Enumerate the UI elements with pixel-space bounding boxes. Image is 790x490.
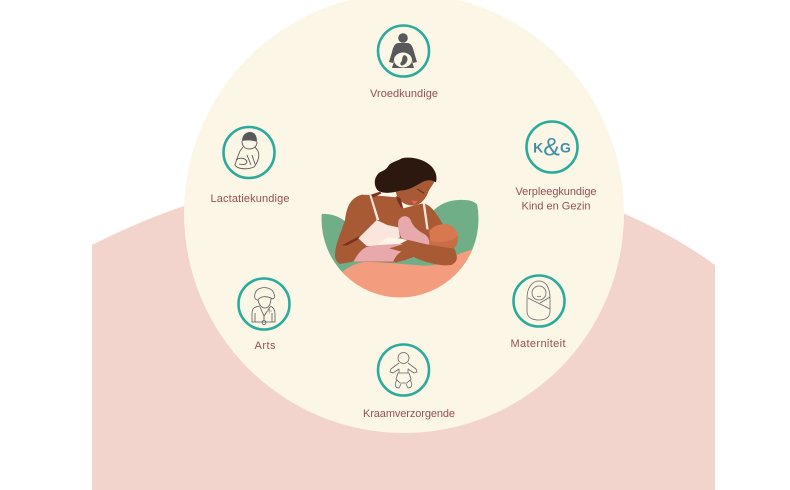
infographic canvas — [92, 0, 715, 490]
mother's forearm — [389, 243, 456, 265]
pink background hill — [92, 168, 715, 490]
baby head — [429, 224, 458, 247]
icon: K&G logo: K — [533, 140, 543, 156]
icon: swaddled baby outline — [514, 276, 564, 326]
woman's body — [335, 195, 457, 265]
label: Kraamverzorgende — [363, 408, 455, 420]
dress and straps — [358, 220, 400, 246]
label: Arts — [254, 340, 276, 352]
Kraamverzorgende item — [363, 344, 455, 420]
icon: baby in diaper outline — [378, 344, 429, 396]
icon: K&G logo: & — [543, 134, 560, 162]
central illustration: breastfeeding mother — [315, 158, 480, 305]
icon: doctor outline — [238, 278, 290, 330]
Arts item — [238, 278, 290, 352]
icon: mother nursing outline — [224, 127, 274, 178]
label: Vroedkundige — [370, 88, 438, 100]
lips — [411, 200, 418, 205]
eye — [417, 189, 424, 193]
Materniteit item — [510, 276, 566, 350]
label: Lactatiekundige — [210, 193, 290, 205]
pink blanket — [353, 244, 403, 262]
label: Verpleegkundige — [516, 186, 596, 198]
icon: pregnant woman — [378, 26, 429, 76]
cream central circle — [184, 0, 624, 433]
hair — [375, 158, 436, 193]
neck and face — [395, 173, 435, 205]
Lactatiekundige item — [210, 127, 290, 205]
icon: K&G logo: G — [560, 140, 571, 156]
Vroedkundige item — [370, 26, 438, 100]
icon: K&G logo — [526, 122, 578, 172]
baby arm — [398, 216, 429, 245]
neck shadow — [396, 196, 403, 209]
Verpleegkundige Kind en Gezin item — [516, 122, 596, 212]
Verpleegkundige Kind en Gezin item: Kind en Gezin — [522, 200, 590, 212]
label: Materniteit — [510, 338, 566, 350]
